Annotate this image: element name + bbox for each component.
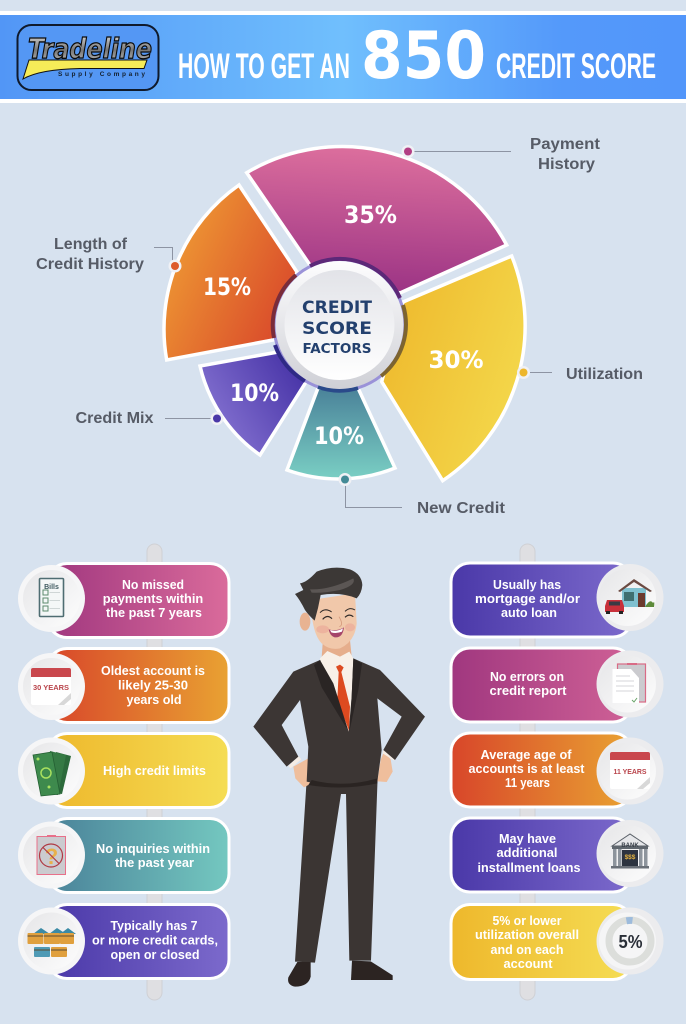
title	[178, 19, 656, 94]
card text: No missed	[122, 578, 184, 592]
segment: credit mix 10%: 10%	[230, 379, 279, 407]
card text: installment loans	[478, 861, 581, 875]
card text: auto loan	[501, 606, 557, 620]
card text: payments within	[103, 592, 203, 606]
tie	[336, 665, 350, 731]
segment: payment history 35%: 35%	[344, 201, 397, 229]
hub label	[302, 298, 372, 357]
card text: 11 years	[505, 776, 550, 790]
callout: utilization: Utilization	[566, 366, 643, 383]
card text: and on each	[490, 943, 564, 957]
callout: payment history	[402, 136, 601, 173]
icon: calendar 30 years	[31, 668, 71, 705]
card: seven credit cards	[18, 904, 229, 978]
icon: credit report	[612, 663, 646, 703]
center hub	[272, 258, 406, 392]
card text: or more credit cards,	[92, 934, 218, 948]
logo: Tradeline Supply Company: Tradeline	[28, 32, 152, 65]
icon: no question clipboard	[37, 835, 66, 874]
callout: new credit	[338, 473, 506, 517]
card: additional installment loans	[451, 818, 664, 892]
card: high credit limits	[18, 734, 229, 808]
left pole	[147, 544, 162, 1000]
title: 850	[361, 19, 486, 94]
callout: credit mix	[76, 410, 224, 427]
callout: utilization	[517, 366, 643, 383]
card text: the past year	[115, 856, 194, 870]
callout: credit mix: Credit Mix	[76, 410, 154, 427]
card text: credit report	[490, 684, 567, 698]
title: HOW TO GET AN	[178, 47, 350, 86]
jacket	[253, 658, 425, 786]
segment: length of credit history 15%	[164, 185, 297, 360]
icon: calendar 30 years: 30 YEARS	[33, 685, 69, 692]
head	[300, 593, 357, 649]
icon: 5 percent gauge: 5%	[618, 932, 642, 952]
belt shadow	[308, 778, 377, 787]
card: average age of accounts	[451, 733, 664, 807]
trousers	[295, 777, 378, 963]
logo: Tradeline Supply Company	[18, 25, 158, 90]
card text	[490, 670, 567, 698]
segment: new credit 10%	[287, 388, 395, 479]
icon: calendar 11 years	[610, 752, 650, 789]
callout: payment history: History	[538, 156, 595, 173]
card text: utilization overall	[475, 928, 579, 942]
card text	[92, 919, 218, 962]
segment: payment history 35%	[247, 147, 507, 293]
shoes	[288, 961, 393, 987]
card text: No inquiries within	[96, 842, 210, 856]
right pole	[520, 544, 535, 1000]
icon: bank: BANK	[621, 843, 639, 849]
segment: credit mix 10%	[200, 352, 306, 455]
illustration: smiling businessman	[253, 568, 425, 987]
card: five percent utilization	[451, 904, 664, 980]
card text	[103, 578, 203, 620]
card text: Usually has	[493, 578, 561, 592]
card text: 5% or lower	[492, 914, 562, 928]
callout: new credit: New Credit	[417, 500, 506, 517]
callout: length of credit history: Credit History	[36, 256, 144, 273]
shirt	[320, 651, 353, 732]
card text: Average age of	[480, 748, 572, 762]
icon: bank	[611, 834, 649, 868]
card text	[96, 842, 210, 870]
icon: 5 percent gauge	[609, 916, 651, 962]
lapels	[314, 658, 362, 732]
segment: length of credit history 15%: 15%	[203, 273, 251, 301]
card: no errors	[451, 648, 664, 722]
callout: payment history: Payment	[530, 136, 601, 153]
card text: May have	[499, 832, 556, 846]
callout: length of credit history	[36, 236, 182, 273]
logo: Tradeline Supply Company: Supply Company	[58, 71, 145, 78]
card text: accounts is at least	[468, 762, 585, 776]
hub label: FACTORS	[302, 342, 372, 357]
hub label: SCORE	[302, 319, 372, 339]
segment: new credit 10%: 10%	[314, 422, 364, 450]
hands	[293, 752, 393, 787]
card: oldest account	[18, 648, 229, 722]
icon: no question clipboard: ?	[45, 844, 58, 869]
card text: High credit limits	[103, 764, 206, 778]
card text: years old	[126, 693, 182, 707]
icon: credit cards	[28, 928, 76, 957]
card text: likely 25-30	[118, 678, 188, 692]
card text	[101, 664, 205, 707]
card text: Oldest account is	[101, 664, 205, 678]
card: mortgage or auto loan	[451, 563, 664, 637]
card text: mortgage and/or	[475, 592, 580, 606]
card text	[478, 832, 581, 875]
icon: bank: $$$	[625, 854, 636, 861]
header banner	[0, 11, 686, 103]
callout: length of credit history: Length of	[54, 236, 128, 253]
card text: open or closed	[110, 948, 200, 962]
card text: Typically has 7	[110, 919, 198, 933]
icon: calendar 11 years: 11 YEARS	[614, 769, 647, 776]
card text	[468, 748, 585, 790]
card text	[475, 578, 580, 620]
card text: the past 7 years	[106, 606, 202, 620]
card text	[475, 914, 579, 971]
neck	[322, 640, 352, 665]
card text: additional	[496, 846, 558, 860]
icon: bills checklist	[40, 578, 64, 616]
pie chart: credit score factors	[164, 147, 525, 481]
icon: bills checklist: Bills	[44, 584, 59, 591]
segment: utilization 30%	[382, 256, 525, 481]
hub label: CREDIT	[302, 298, 372, 318]
segment: utilization 30%: 30%	[428, 346, 484, 374]
card text: No errors on	[490, 670, 564, 684]
icon: house and car	[605, 579, 654, 614]
card: no inquiries	[18, 818, 229, 892]
hair	[295, 568, 362, 621]
cuffs	[288, 750, 396, 768]
card text: account	[504, 957, 553, 971]
icon: cash	[33, 751, 71, 796]
card: no missed payments	[18, 564, 229, 638]
